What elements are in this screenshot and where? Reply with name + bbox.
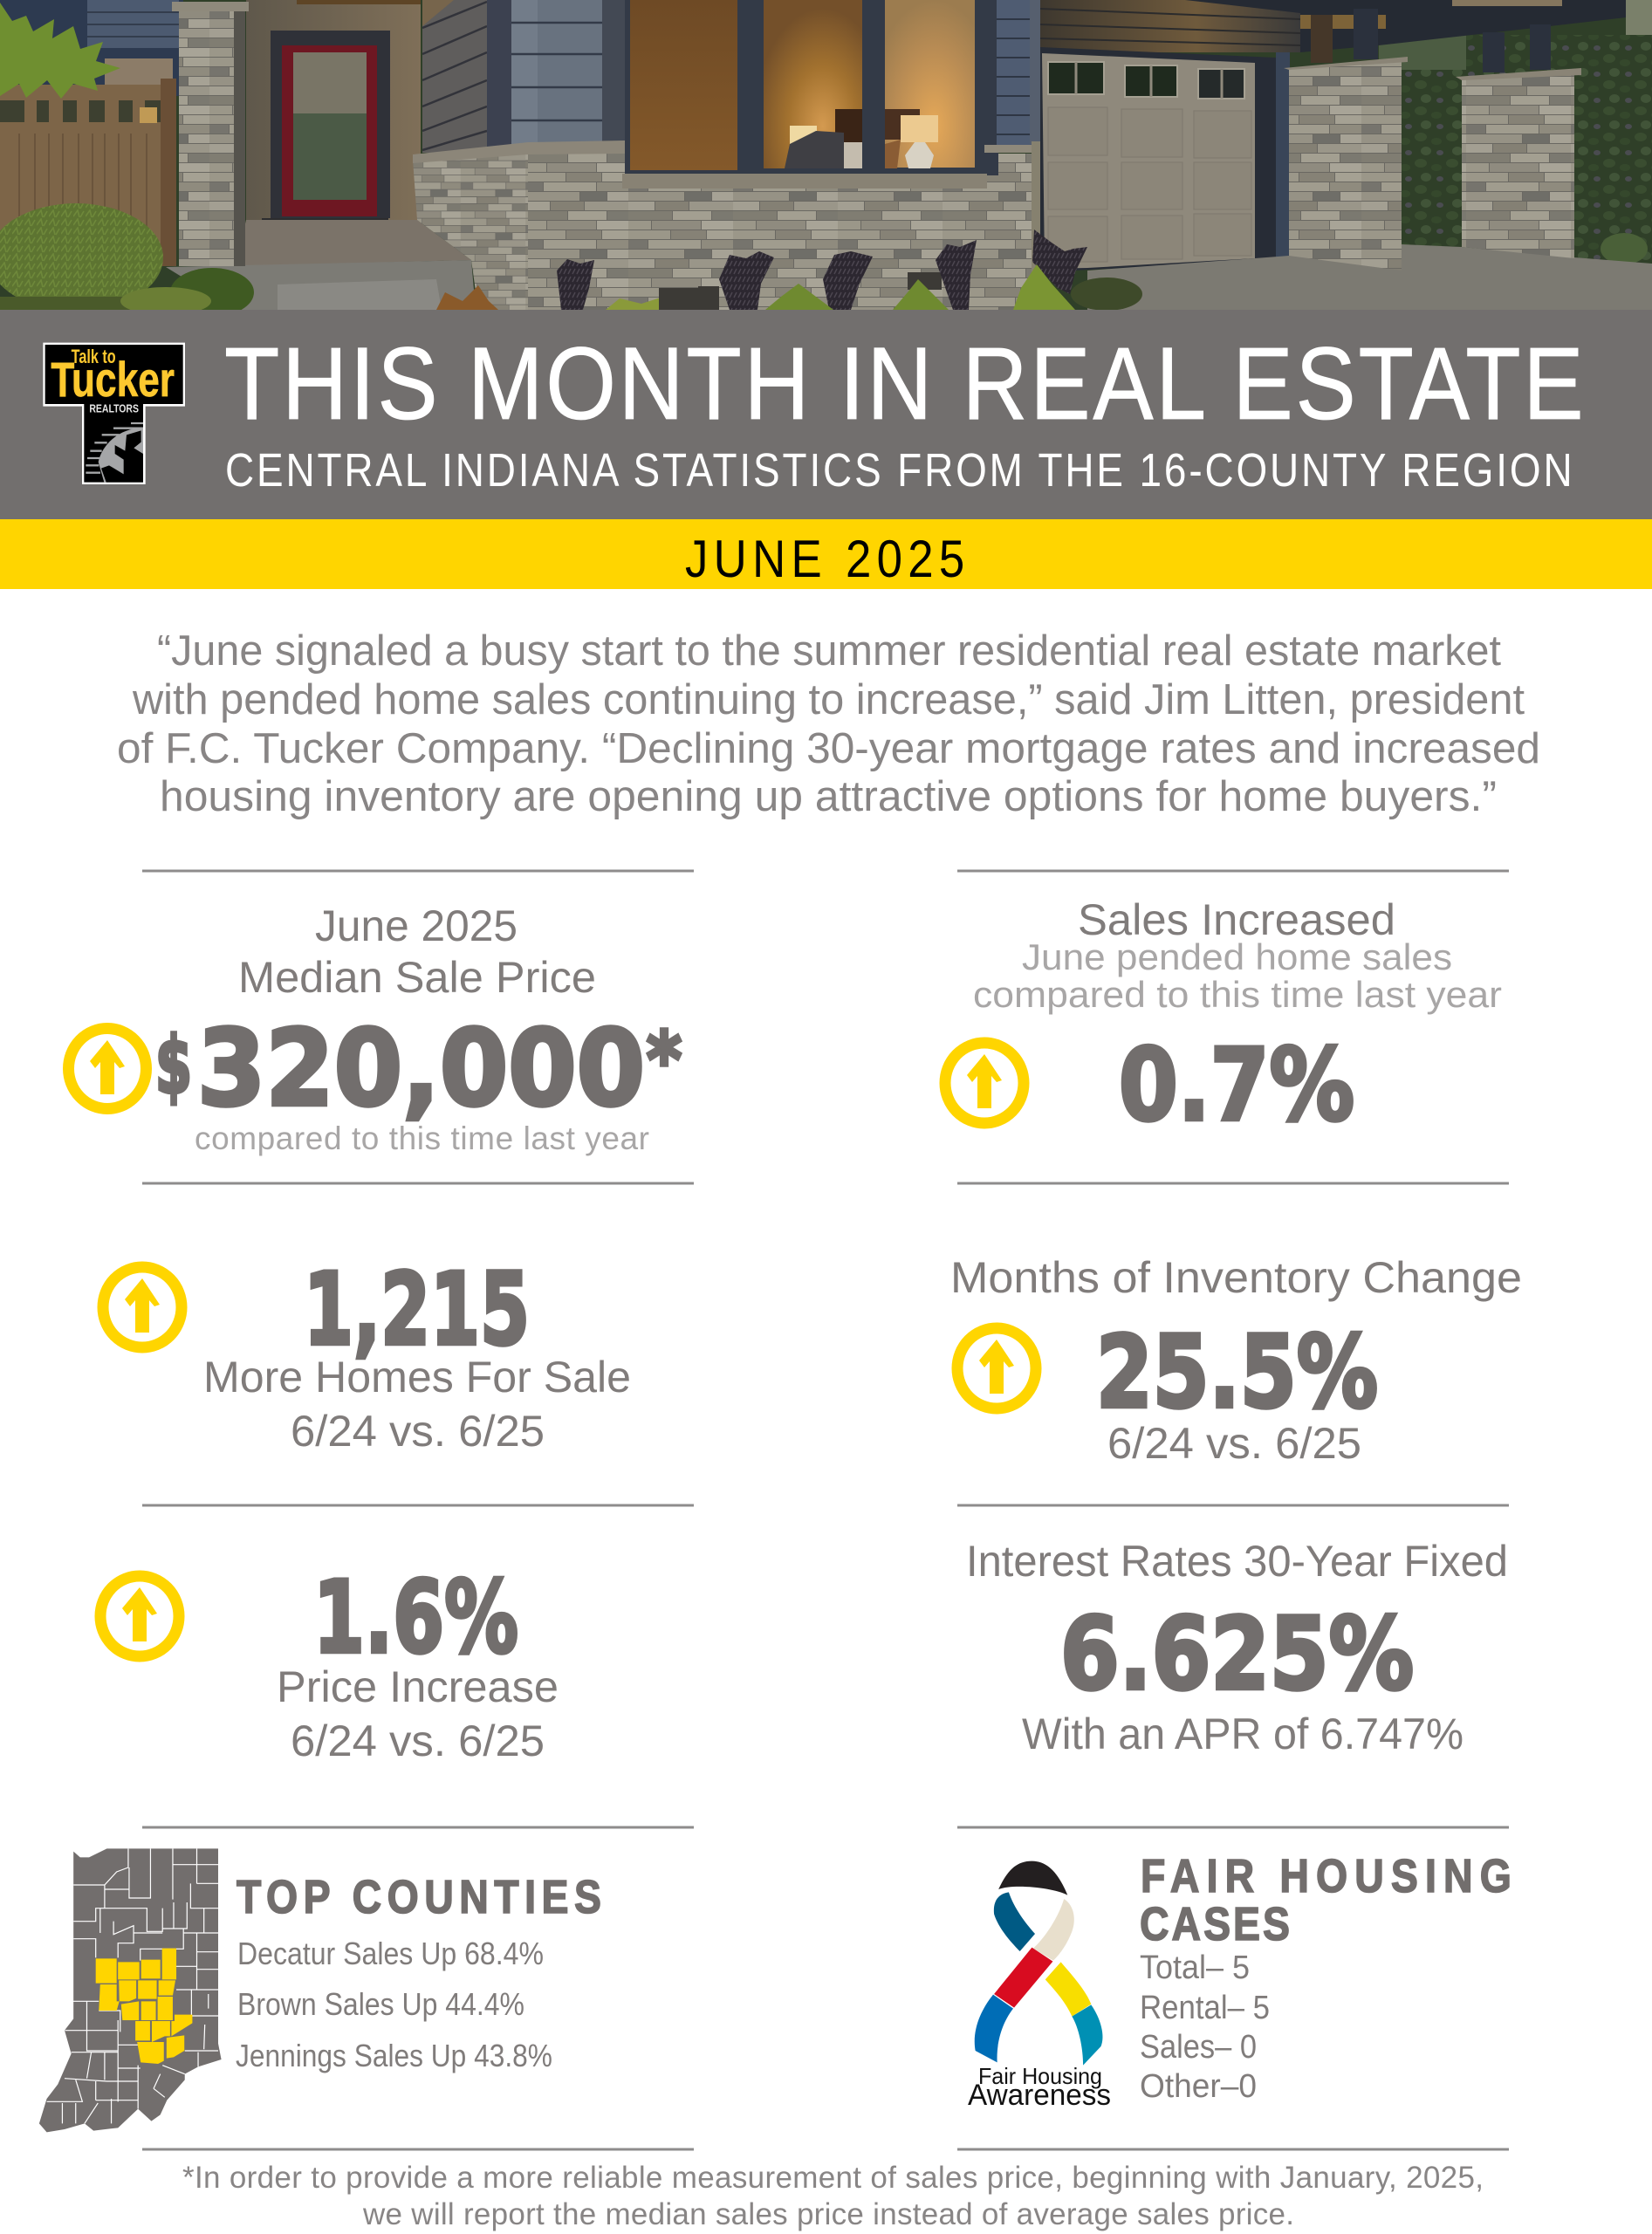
icon: up arrow bbox=[945, 1043, 1024, 1123]
panel: fair housing cases: Sales– 0 bbox=[1140, 2029, 1257, 2066]
panel: interest rates: With an APR of 6.747% bbox=[1022, 1710, 1463, 1758]
porch wall and door bbox=[246, 0, 421, 223]
panel: interest rates: 6.625% bbox=[1060, 1596, 1414, 1712]
fence bbox=[0, 85, 175, 264]
eaves and posts bbox=[1185, 0, 1626, 52]
stone pillars bbox=[1289, 61, 1402, 271]
quote: “June signaled a busy start to the summer residential real estate market bbox=[157, 627, 1501, 675]
quote: housing inventory are opening up attractive options for home buyers.” bbox=[160, 773, 1497, 820]
panel: fair housing cases: Total– 5 bbox=[1140, 1950, 1250, 1986]
panel: sales increased bbox=[945, 895, 1502, 1143]
stone column bbox=[179, 7, 236, 266]
panel: median sale price: Median Sale Price bbox=[238, 953, 596, 1002]
panel: more homes for sale bbox=[103, 1251, 631, 1456]
icon: up arrow bbox=[957, 1328, 1036, 1408]
icon: up arrow bbox=[103, 1267, 182, 1347]
panel: median sale price: June 2025 bbox=[315, 901, 518, 950]
panel: price increase: 6/24 vs. 6/25 bbox=[291, 1717, 545, 1765]
title banner bbox=[0, 310, 1652, 519]
subtitle: CENTRAL INDIANA STATISTICS FROM THE 16-COUNTY REGION bbox=[225, 444, 1573, 497]
footnote: we will report the median sales price instead of average sales price. bbox=[362, 2197, 1294, 2231]
foliage bbox=[1402, 35, 1652, 264]
panel: median sale price: compared to this time last year bbox=[195, 1120, 649, 1156]
title: THIS MONTH IN REAL ESTATE bbox=[224, 326, 1584, 441]
quote bbox=[117, 627, 1540, 820]
siding and window wall bbox=[422, 0, 489, 153]
date band bbox=[0, 519, 1652, 589]
map: Indiana counties bbox=[39, 1848, 222, 2132]
panel: top counties: Decatur Sales Up 68.4% bbox=[237, 1936, 544, 1971]
panel: months of inventory change: 6/24 vs. 6/25 bbox=[1107, 1419, 1361, 1468]
ribbon caption: Awareness bbox=[968, 2079, 1111, 2112]
stone walls bbox=[413, 154, 532, 310]
panel: top counties: Brown Sales Up 44.4% bbox=[237, 1986, 524, 2022]
price value: * bbox=[647, 1015, 682, 1105]
panel: fair housing cases: CASES bbox=[1140, 1897, 1290, 1950]
panel: sales increased: Sales Increased bbox=[1078, 895, 1395, 944]
panel: sales increased: June pended home sales bbox=[1022, 936, 1452, 977]
logo: Talk to Tucker Realtors: REALTORS bbox=[89, 402, 139, 415]
door side bushes and plants bbox=[0, 203, 163, 312]
panel: top counties bbox=[236, 1870, 601, 2073]
right siding bbox=[997, 0, 1032, 145]
tree bbox=[0, 3, 120, 99]
quote: with pended home sales continuing to increase,” said Jim Litten, president bbox=[132, 676, 1525, 723]
icon: fair housing awareness ribbon bbox=[975, 1861, 1103, 2066]
panel: more homes for sale: More Homes For Sale bbox=[203, 1353, 631, 1401]
panel: months of inventory change: Months of Inventory Change bbox=[950, 1253, 1522, 1302]
ribbon caption bbox=[968, 2063, 1111, 2112]
date: JUNE 2025 bbox=[685, 530, 964, 588]
panel: interest rates bbox=[966, 1537, 1508, 1758]
garage bbox=[1040, 0, 1300, 52]
panel: fair housing cases bbox=[1140, 1849, 1511, 2105]
panel: price increase: 1.6% bbox=[313, 1559, 518, 1676]
panel: fair housing cases: FAIR HOUSING bbox=[1141, 1849, 1511, 1902]
panel: fair housing cases: Rental– 5 bbox=[1140, 1990, 1270, 2026]
logo: Talk to Tucker Realtors: Talk to bbox=[72, 346, 116, 367]
left house bbox=[0, 0, 183, 96]
panel: median sale price bbox=[68, 901, 682, 1156]
icon: up arrow bbox=[100, 1576, 179, 1656]
panel: months of inventory change bbox=[950, 1253, 1522, 1468]
panel: sales increased: 0.7% bbox=[1119, 1027, 1354, 1143]
footnote: *In order to provide a more reliable measurement of sales price, beginning with January, 2025, bbox=[182, 2161, 1484, 2195]
price value: 320,000 bbox=[197, 1009, 645, 1130]
panel: top counties: TOP COUNTIES bbox=[236, 1870, 601, 1923]
logo: Talk to Tucker Realtors: Tucker bbox=[51, 352, 175, 407]
footnote bbox=[182, 2161, 1484, 2231]
panel: top counties: Jennings Sales Up 43.8% bbox=[236, 2038, 552, 2073]
panel: price increase: Price Increase bbox=[277, 1662, 559, 1711]
panel: sales increased: compared to this time last year bbox=[973, 974, 1502, 1015]
panel: fair housing cases: Other–0 bbox=[1140, 2068, 1257, 2105]
panel: interest rates: Interest Rates 30-Year Fixed bbox=[966, 1537, 1508, 1586]
logo: Talk to Tucker Realtors bbox=[43, 343, 185, 484]
quote: of F.C. Tucker Company. “Declining 30-year mortgage rates and increased bbox=[117, 725, 1540, 772]
icon: up arrow bbox=[68, 1028, 147, 1108]
window bbox=[625, 0, 998, 175]
panel: months of inventory change: 25.5% bbox=[1096, 1314, 1378, 1430]
ribbon caption: Fair Housing bbox=[978, 2063, 1102, 2089]
price value: $ bbox=[155, 1020, 192, 1112]
header photo: house exterior bbox=[0, 0, 1652, 317]
panel: more homes for sale: 6/24 vs. 6/25 bbox=[291, 1407, 545, 1456]
driveway bbox=[1087, 244, 1652, 310]
panel: price increase bbox=[100, 1559, 559, 1765]
panel: more homes for sale: 1,215 bbox=[304, 1251, 530, 1367]
